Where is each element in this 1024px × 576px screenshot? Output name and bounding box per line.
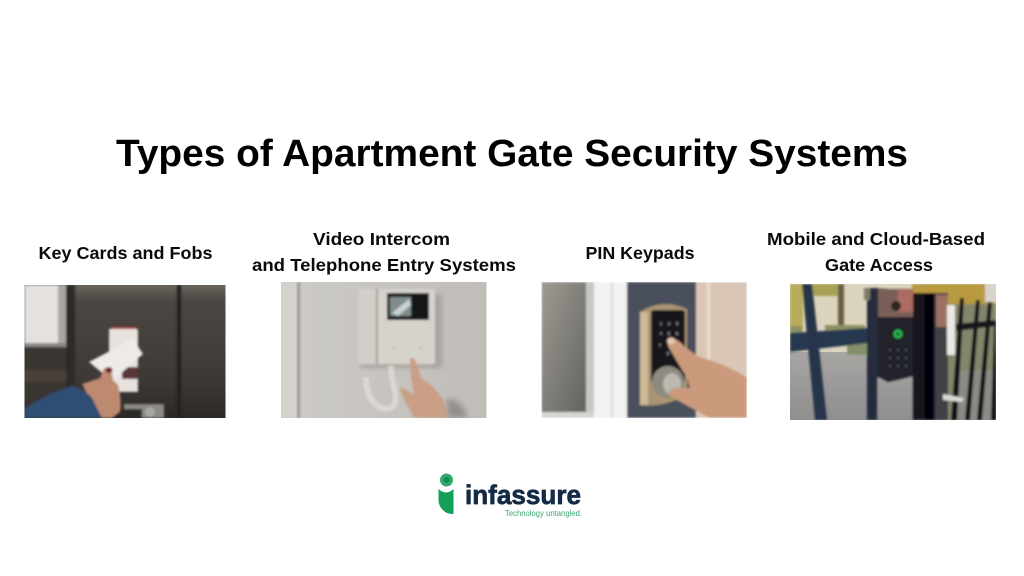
heading: mobile and cloud-based gate access: Mobile and Cloud-Based bbox=[767, 229, 985, 249]
photo: PIN keypad lock: 4 bbox=[660, 331, 663, 336]
heading: mobile and cloud-based gate access bbox=[767, 229, 985, 275]
logo tagline: Technology untangled. bbox=[505, 509, 582, 518]
photo: PIN keypad lock: 6 bbox=[676, 331, 679, 336]
photo: PIN keypad lock: 7 bbox=[659, 343, 662, 348]
photo: PIN keypad lock: 1 bbox=[660, 321, 663, 326]
photo: PIN keypad lock: 5 bbox=[668, 331, 671, 336]
photo: video intercom bbox=[281, 282, 486, 418]
photo: PIN keypad lock: 3 bbox=[676, 321, 679, 326]
icon: logo i mark bbox=[438, 474, 454, 514]
heading: PIN keypads: PIN Keypads bbox=[586, 243, 695, 263]
photo: PIN keypad lock bbox=[542, 282, 747, 418]
photo: mobile gate access panel bbox=[790, 284, 996, 420]
heading: video intercom and telephone entry systems: and Telephone Entry Systems bbox=[252, 255, 516, 275]
photo: PIN keypad lock: 0 bbox=[667, 351, 670, 356]
logo wordmark: infassure bbox=[465, 480, 581, 510]
heading: key cards and fobs: Key Cards and Fobs bbox=[38, 243, 213, 263]
heading: video intercom and telephone entry systems bbox=[252, 229, 516, 275]
photo: PIN keypad lock: 2 bbox=[668, 321, 671, 326]
title: Types of Apartment Gate Security Systems bbox=[116, 133, 908, 175]
logo: infassure bbox=[438, 474, 582, 518]
heading: video intercom and telephone entry systems: Video Intercom bbox=[313, 229, 450, 249]
photo: key card at reader bbox=[24, 285, 226, 418]
heading: mobile and cloud-based gate access: Gate Access bbox=[825, 255, 933, 275]
